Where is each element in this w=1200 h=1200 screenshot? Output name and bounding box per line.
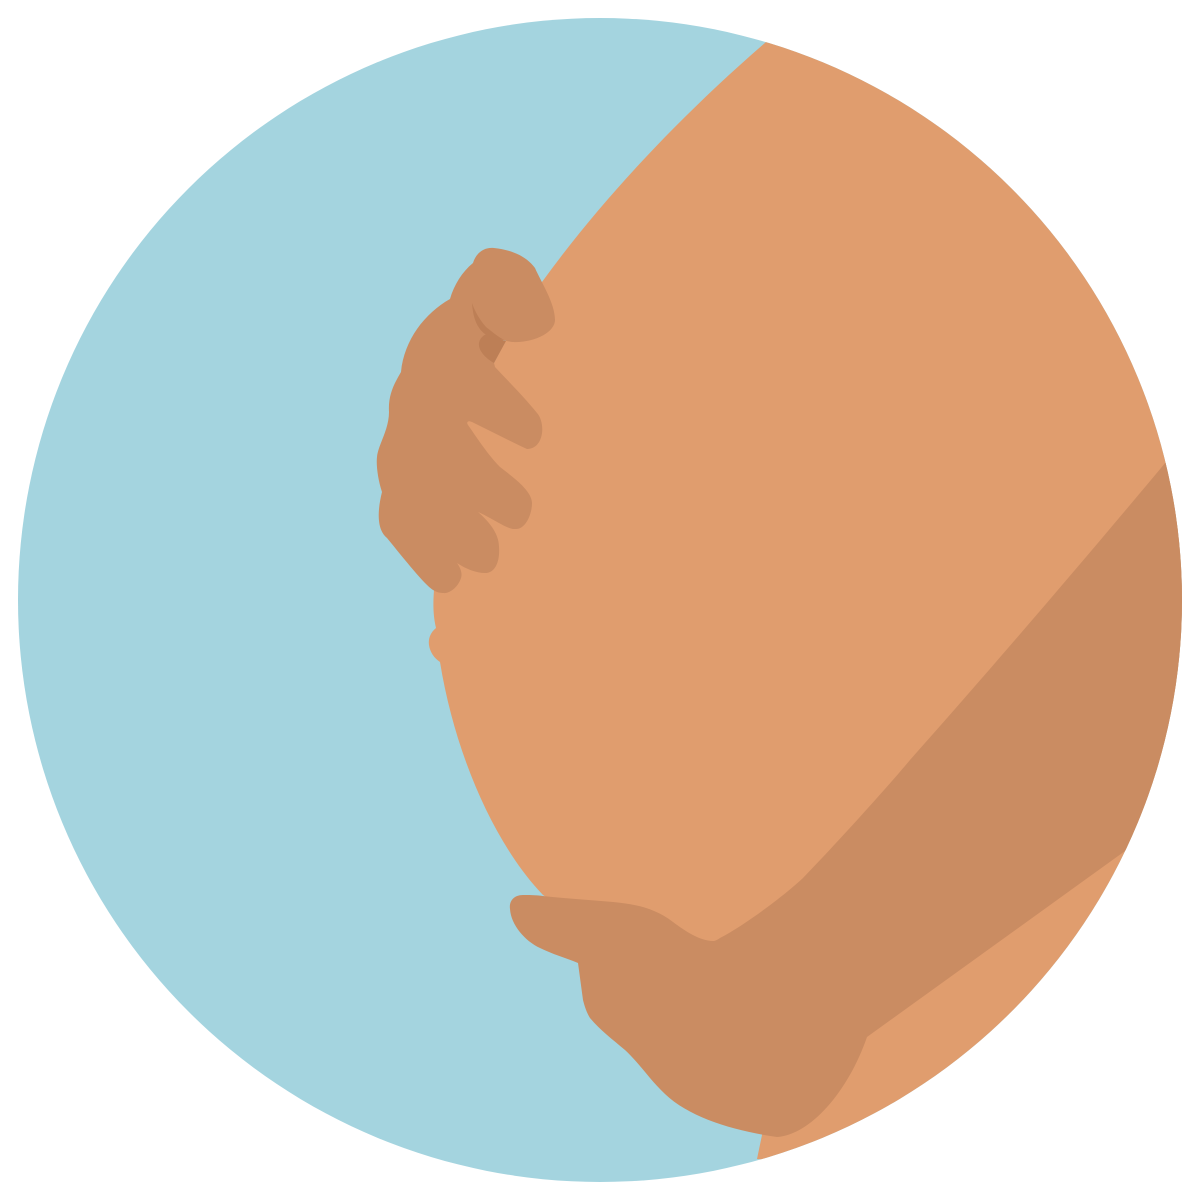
shadow under thumb: [479, 333, 506, 363]
thumb crease: [472, 303, 504, 340]
belly: [429, 0, 1200, 1200]
arm and lower hand: [510, 462, 1182, 1137]
upper hand: [377, 248, 555, 593]
fingers and thumb: [377, 248, 555, 593]
scene clipped to circle: [377, 0, 1200, 1200]
